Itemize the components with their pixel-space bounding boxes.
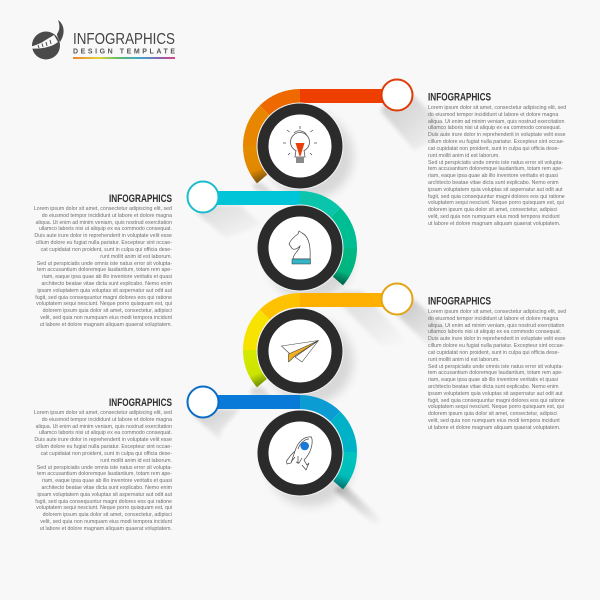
text block 3: Duis aute irure dolor in reprehenderit in voluptate velit esse <box>428 336 566 342</box>
icon: chess knight <box>289 231 310 264</box>
text block 4: fugit, sed quia consequuntur magni dolores eos qui ratione <box>35 499 172 505</box>
text block 2: ullamco laboris nisi ut aliquip ex ea commodo consequat. <box>39 226 172 232</box>
heading 4: INFOGRAPHICS <box>109 397 172 409</box>
text block 1: riam, eaque ipsa quae ab illo inventore veritatis et quasi <box>428 173 558 179</box>
text block 1: dolorem ipsum quia dolor sit amet, consectetur, adipisci <box>428 207 557 213</box>
text block 2: fugit, sed quia consequuntur magni dolores eos qui ratione <box>35 295 172 301</box>
text block 3: ipsam voluptatem quia voluptas sit aspernatur aut odit aut <box>428 391 563 397</box>
text block 2: voluptatem sequi nesciunt. Neque porro quisquam est, qui <box>36 301 172 307</box>
text block 1: aliqua. Ut enim ad minim veniam, quis nostrud exercitation <box>428 119 564 125</box>
text block 4: ut labore et dolore magnam aliquam quaerat voluptatem. <box>40 526 172 532</box>
text block 3: runt mollit anim id est laborum. <box>428 357 500 363</box>
text block 2: Sed ut perspiciatis unde omnis iste natus error sit volupta- <box>37 260 172 266</box>
text block 1: ipsam voluptatem quia voluptas sit aspernatur aut odit aut <box>428 187 563 193</box>
text block 3: dolorem ipsum quia dolor sit amet, consectetur, adipisci <box>428 411 557 417</box>
text block 3: aliqua. Ut enim ad minim veniam, quis nostrud exercitation <box>428 323 564 329</box>
text block 4: cat cupidatat non proident, sunt in culpa qui officia dese- <box>41 451 172 457</box>
text block 4: velit, sed quia non numquam eius modi tempora incidunt <box>40 519 172 525</box>
text block 4 <box>34 410 172 532</box>
text block 4: runt mollit anim id est laborum. <box>100 458 172 464</box>
ribbon 2: teal <box>203 198 350 281</box>
text block 4: voluptatem sequi nesciunt. Neque porro quisquam est, qui <box>36 505 172 511</box>
text block 4: Sed ut perspiciatis unde omnis iste natus error sit volupta- <box>37 464 172 470</box>
icon: light bulb <box>283 126 317 163</box>
text block 3: tem accusantium doloremque laudantium, totam rem ape- <box>428 370 563 376</box>
handle 4 <box>188 386 218 418</box>
text block 4: aliqua. Ut enim ad minim veniam, quis nostrud exercitation <box>36 424 172 430</box>
text block 4: ullamco laboris nisi ut aliquip ex ea commodo consequat. <box>39 430 172 436</box>
text block 1: fugit, sed quia consequuntur magni dolores eos qui ratione <box>428 194 565 200</box>
heading 2: INFOGRAPHICS <box>109 193 172 205</box>
text block 1: ut labore et dolore magnam aliquam quaerat voluptatem. <box>428 221 560 227</box>
text block 4: tem accusantium doloremque laudantium, totam rem ape- <box>37 471 172 477</box>
heading 3: INFOGRAPHICS <box>428 296 491 308</box>
text block 4: ipsam voluptatem quia voluptas sit aspernatur aut odit aut <box>37 492 172 498</box>
text block 2: velit, sed quia non numquam eius modi tempora incidunt <box>40 315 172 321</box>
text block 3: fugit, sed quia consequuntur magni dolores eos qui ratione <box>428 398 565 404</box>
text block 2: riam, eaque ipsa quae ab illo inventore veritatis et quasi <box>42 274 172 280</box>
text block 1 <box>428 105 566 227</box>
logo subtitle: DESIGN TEMPLATE <box>73 48 175 56</box>
logo icon <box>26 20 64 60</box>
text block 1: cillum dolore eu fugiat nulla pariatur. Excepteur sint occae- <box>428 139 564 145</box>
text block 1: runt mollit anim id est laborum. <box>428 153 500 159</box>
text block 2: ipsam voluptatem quia voluptas sit aspernatur aut odit aut <box>37 288 172 294</box>
text block 4: architecto beatae vitae dicta sunt explicabo. Nemo enim <box>41 485 172 491</box>
ring 2 with chess icon <box>256 204 344 292</box>
ribbon 4: blue <box>203 402 350 485</box>
text block 2: aliqua. Ut enim ad minim veniam, quis nostrud exercitation <box>36 220 172 226</box>
handle 2 <box>188 182 218 212</box>
icon: paper plane <box>282 340 318 362</box>
text block 4: Lorem ipsum dolor sit amet, consectetur adipiscing elit, sed <box>34 410 172 416</box>
text block 2: Duis aute irure dolor in reprehenderit in voluptate velit esse <box>34 233 172 239</box>
text block 1: cat cupidatat non proident, sunt in culpa qui officia dese- <box>428 146 559 152</box>
ribbon 3: yellow <box>250 300 397 383</box>
ring 3 with plane icon <box>256 308 344 394</box>
text block 2: runt mollit anim id est laborum. <box>100 254 172 260</box>
text block 1: Sed ut perspiciatis unde omnis iste natus error sit volupta- <box>428 160 563 166</box>
ribbon 1: orange-red <box>250 96 397 179</box>
heading 1: INFOGRAPHICS <box>428 92 491 104</box>
handle 3 <box>382 284 412 314</box>
text block 3: Lorem ipsum dolor sit amet, consectetur adipiscing elit, sed <box>428 309 566 315</box>
text block 3: cat cupidatat non proident, sunt in culpa qui officia dese- <box>428 350 559 356</box>
text block 3: do eiusmod tempor incididunt ut labore et dolore magna <box>428 316 558 322</box>
text block 1: voluptatem sequi nesciunt. Neque porro quisquam est, qui <box>428 200 564 206</box>
text block 2: cat cupidatat non proident, sunt in culpa qui officia dese- <box>41 247 172 253</box>
text block 3: riam, eaque ipsa quae ab illo inventore veritatis et quasi <box>428 377 558 383</box>
text block 3: Sed ut perspiciatis unde omnis iste natus error sit volupta- <box>428 364 563 370</box>
text block 4: Duis aute irure dolor in reprehenderit in voluptate velit esse <box>34 437 172 443</box>
text block 3: cillum dolore eu fugiat nulla pariatur. Excepteur sint occae- <box>428 343 564 349</box>
text block 1: Lorem ipsum dolor sit amet, consectetur adipiscing elit, sed <box>428 105 566 111</box>
text block 2: do eiusmod tempor incididunt ut labore et dolore magna <box>42 213 172 219</box>
text block 3: ut labore et dolore magnam aliquam quaerat voluptatem. <box>428 425 560 431</box>
text block 2: dolorem ipsum quia dolor sit amet, consectetur, adipisci <box>43 308 172 314</box>
text block 2: tem accusantium doloremque laudantium, totam rem ape- <box>37 267 172 273</box>
icon: rocket <box>286 437 312 470</box>
text block 1: Duis aute irure dolor in reprehenderit in voluptate velit esse <box>428 132 566 138</box>
text block 3: velit, sed quia non numquam eius modi tempora incidunt <box>428 418 560 424</box>
ring 1 with bulb icon <box>256 102 344 190</box>
text block 3: ullamco laboris nisi ut aliquip ex ea commodo consequat. <box>428 329 561 335</box>
text block 4: do eiusmod tempor incididunt ut labore et dolore magna <box>42 417 172 423</box>
text block 4: dolorem ipsum quia dolor sit amet, consectetur, adipisci <box>43 512 172 518</box>
text block 2 <box>34 206 172 328</box>
text block 3 <box>428 309 566 431</box>
text block 2: cillum dolore eu fugiat nulla pariatur. Excepteur sint occae- <box>36 240 172 246</box>
text block 1: do eiusmod tempor incididunt ut labore et dolore magna <box>428 112 558 118</box>
text block 2: Lorem ipsum dolor sit amet, consectetur adipiscing elit, sed <box>34 206 172 212</box>
text block 1: architecto beatae vitae dicta sunt explicabo. Nemo enim <box>428 180 559 186</box>
long shadows <box>192 79 450 526</box>
text block 4: cillum dolore eu fugiat nulla pariatur. Excepteur sint occae- <box>36 444 172 450</box>
logo title: INFOGRAPHICS <box>73 31 175 48</box>
text block 1: tem accusantium doloremque laudantium, totam rem ape- <box>428 166 563 172</box>
text block 3: architecto beatae vitae dicta sunt explicabo. Nemo enim <box>428 384 559 390</box>
text block 3: voluptatem sequi nesciunt. Neque porro quisquam est, qui <box>428 404 564 410</box>
ring 4 with rocket icon <box>256 410 344 496</box>
rainbow underline <box>73 57 175 59</box>
text block 4: riam, eaque ipsa quae ab illo inventore veritatis et quasi <box>42 478 172 484</box>
text block 1: ullamco laboris nisi ut aliquip ex ea commodo consequat. <box>428 125 561 131</box>
text block 2: ut labore et dolore magnam aliquam quaerat voluptatem. <box>40 322 172 328</box>
handle 1 <box>382 80 412 110</box>
text block 2: architecto beatae vitae dicta sunt explicabo. Nemo enim <box>41 281 172 287</box>
text block 1: velit, sed quia non numquam eius modi tempora incidunt <box>428 214 560 220</box>
